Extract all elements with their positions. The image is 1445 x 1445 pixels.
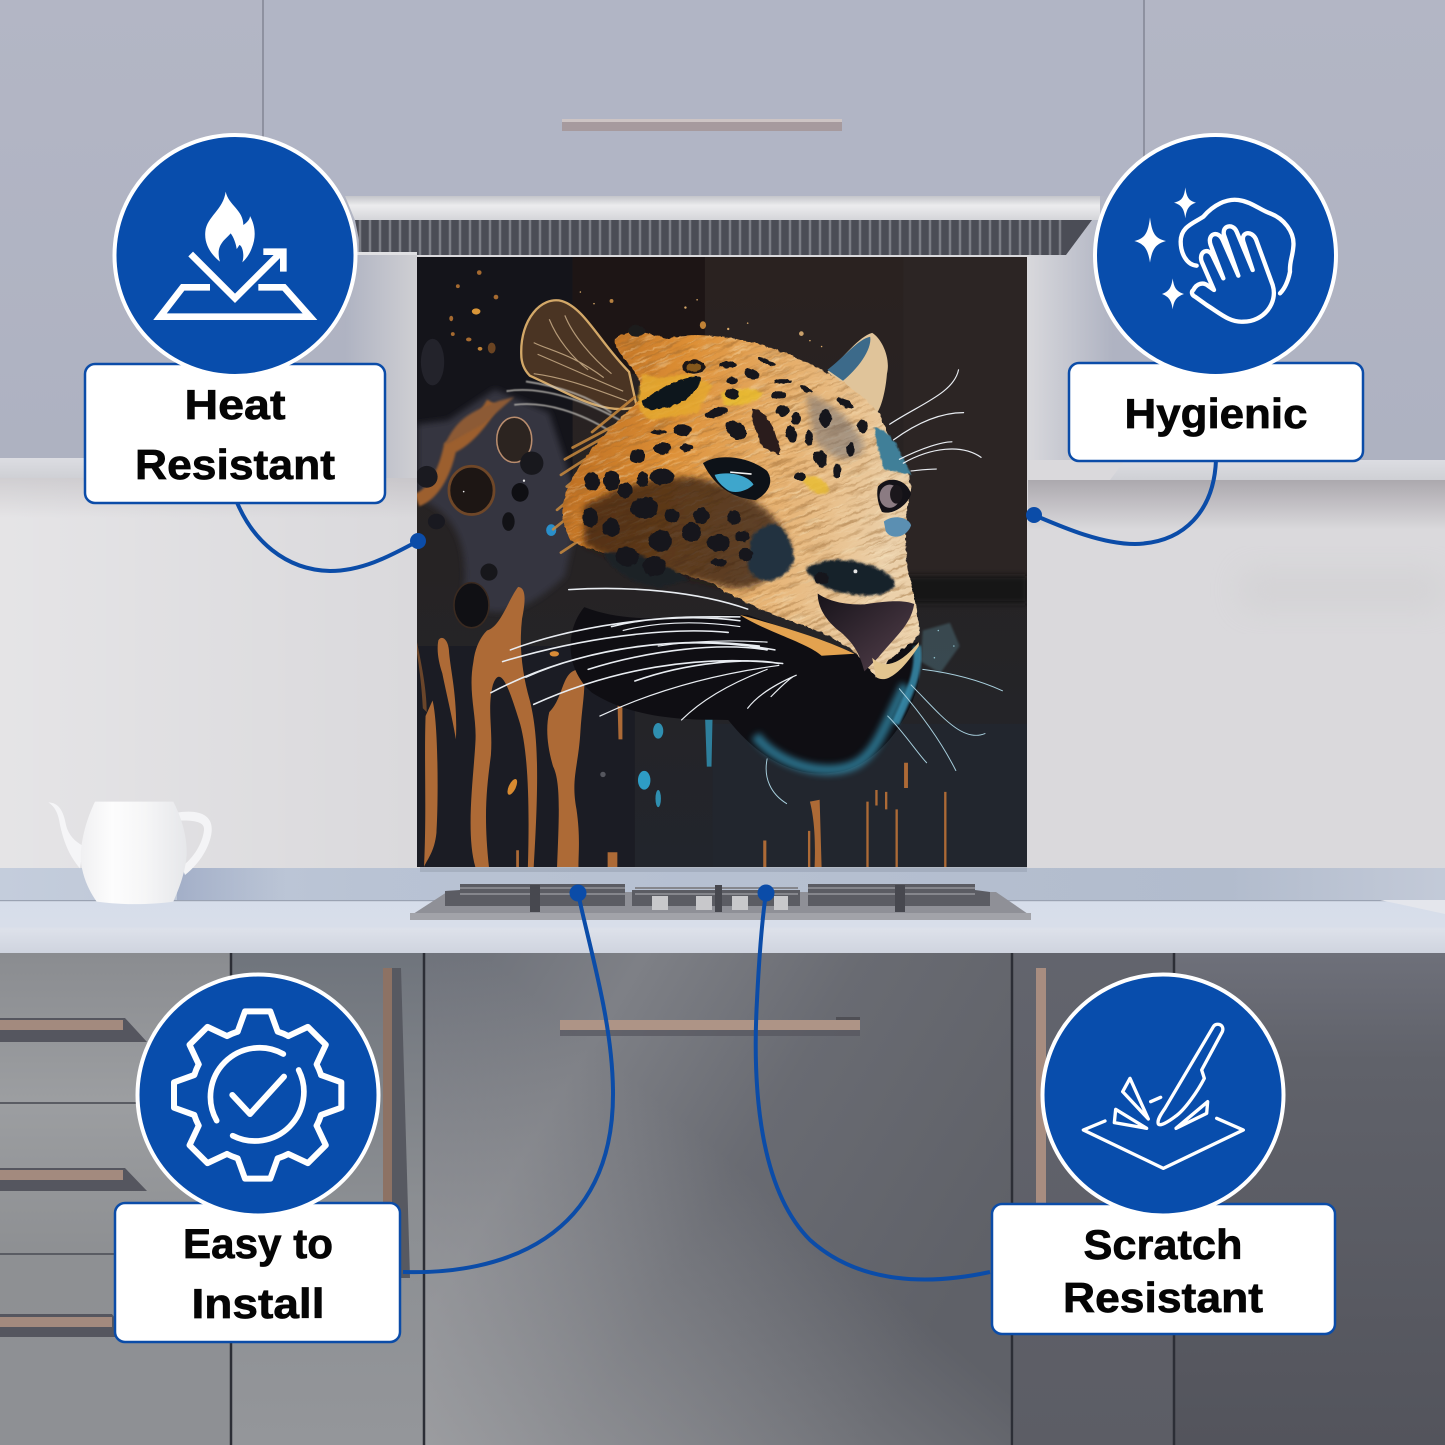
lower cabinets	[0, 953, 1445, 1445]
splatter dots around ear and nose	[463, 291, 955, 777]
callout: scratch resistant	[992, 974, 1335, 1334]
label text line 2: Install	[192, 1280, 324, 1327]
dark cheek and eye shading	[584, 325, 911, 595]
label text: Scratch	[1084, 1221, 1242, 1268]
callout: easy to install	[115, 974, 400, 1342]
icon: knife scratching surface with shards	[1083, 1024, 1243, 1168]
icon disc	[138, 974, 378, 1216]
label box	[1069, 363, 1363, 461]
label text: Heat	[184, 381, 286, 428]
icon disc	[1042, 974, 1284, 1216]
blue and gold splatter	[449, 270, 960, 807]
left ear	[506, 300, 637, 432]
left eye	[703, 457, 770, 500]
callout: heat resistant	[85, 135, 385, 503]
connector: easy to install	[403, 884, 613, 1272]
smoke and liquid at left	[416, 339, 580, 628]
upper cabinets	[0, 0, 1445, 480]
shadow under splashback	[420, 867, 1027, 872]
lower jaw	[571, 607, 919, 774]
label box	[115, 1203, 400, 1342]
right eye	[877, 480, 911, 537]
right ear	[827, 333, 888, 415]
label text: Hygienic	[1124, 390, 1308, 437]
extractor hood	[345, 196, 1100, 255]
connector: heat resistant	[236, 500, 426, 571]
teapot	[48, 802, 212, 904]
icon: hand wiping cloth with sparkles	[1134, 187, 1293, 322]
whiskers	[491, 370, 1002, 804]
connector: hygienic	[1026, 460, 1216, 544]
worktop	[0, 868, 1445, 953]
connector: scratch resistant	[756, 884, 990, 1280]
icon: gear with check mark	[174, 1011, 341, 1179]
fuzzy fur at left edge of head	[553, 397, 650, 553]
background reflections	[417, 257, 1027, 867]
icon: flame over surface with deflecting arrow	[160, 192, 310, 317]
label box	[85, 364, 385, 503]
callout: hygienic	[1069, 135, 1363, 461]
gas cooktop	[410, 884, 1031, 920]
leopard glass splashback artwork	[417, 257, 1027, 867]
leopard spots	[582, 356, 868, 584]
label box	[992, 1204, 1335, 1334]
label text: Easy to	[183, 1220, 333, 1267]
icon disc	[114, 135, 356, 376]
nose	[740, 569, 919, 679]
tiled wall	[0, 0, 1445, 880]
label text line 2: Resistant	[1063, 1274, 1263, 1321]
fur texture	[562, 332, 920, 678]
orange paint drips	[417, 587, 946, 867]
icon disc	[1095, 135, 1336, 376]
leopard head fur	[562, 332, 920, 678]
label text line 2: Resistant	[135, 441, 335, 488]
